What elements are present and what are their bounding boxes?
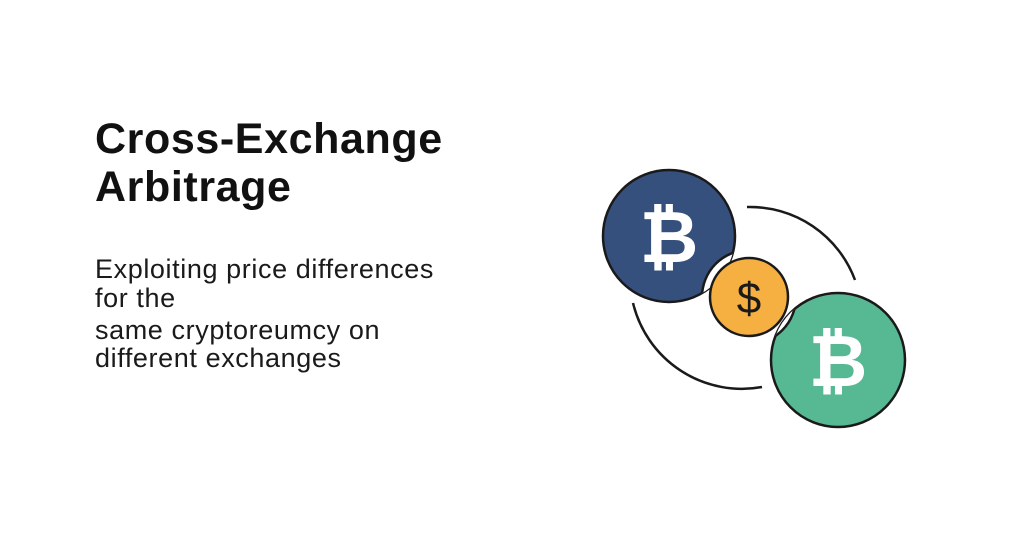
illustration: exchange icons bbox=[602, 168, 906, 428]
icon: green bitcoin coin: ₿ bbox=[809, 322, 867, 402]
subtitle text: same cryptoreumcy on bbox=[95, 315, 380, 345]
title: Arbitrage bbox=[95, 163, 292, 211]
subtitle text bbox=[95, 254, 434, 373]
icon: gold dollar coin: $ bbox=[737, 274, 761, 323]
icon: blue bitcoin coin: ₿ bbox=[640, 198, 698, 278]
icon: blue bitcoin coin bbox=[602, 168, 736, 304]
arrow arc lower bbox=[633, 303, 762, 389]
arrow arc upper bbox=[747, 207, 855, 280]
subtitle text: for the bbox=[95, 283, 176, 313]
title bbox=[95, 115, 443, 211]
icon: green bitcoin coin bbox=[770, 292, 906, 428]
title: Cross-Exchange bbox=[95, 115, 443, 163]
subtitle text: different exchanges bbox=[95, 343, 342, 373]
subtitle text: Exploiting price differences bbox=[95, 254, 434, 284]
icon: gold dollar coin bbox=[710, 258, 788, 336]
